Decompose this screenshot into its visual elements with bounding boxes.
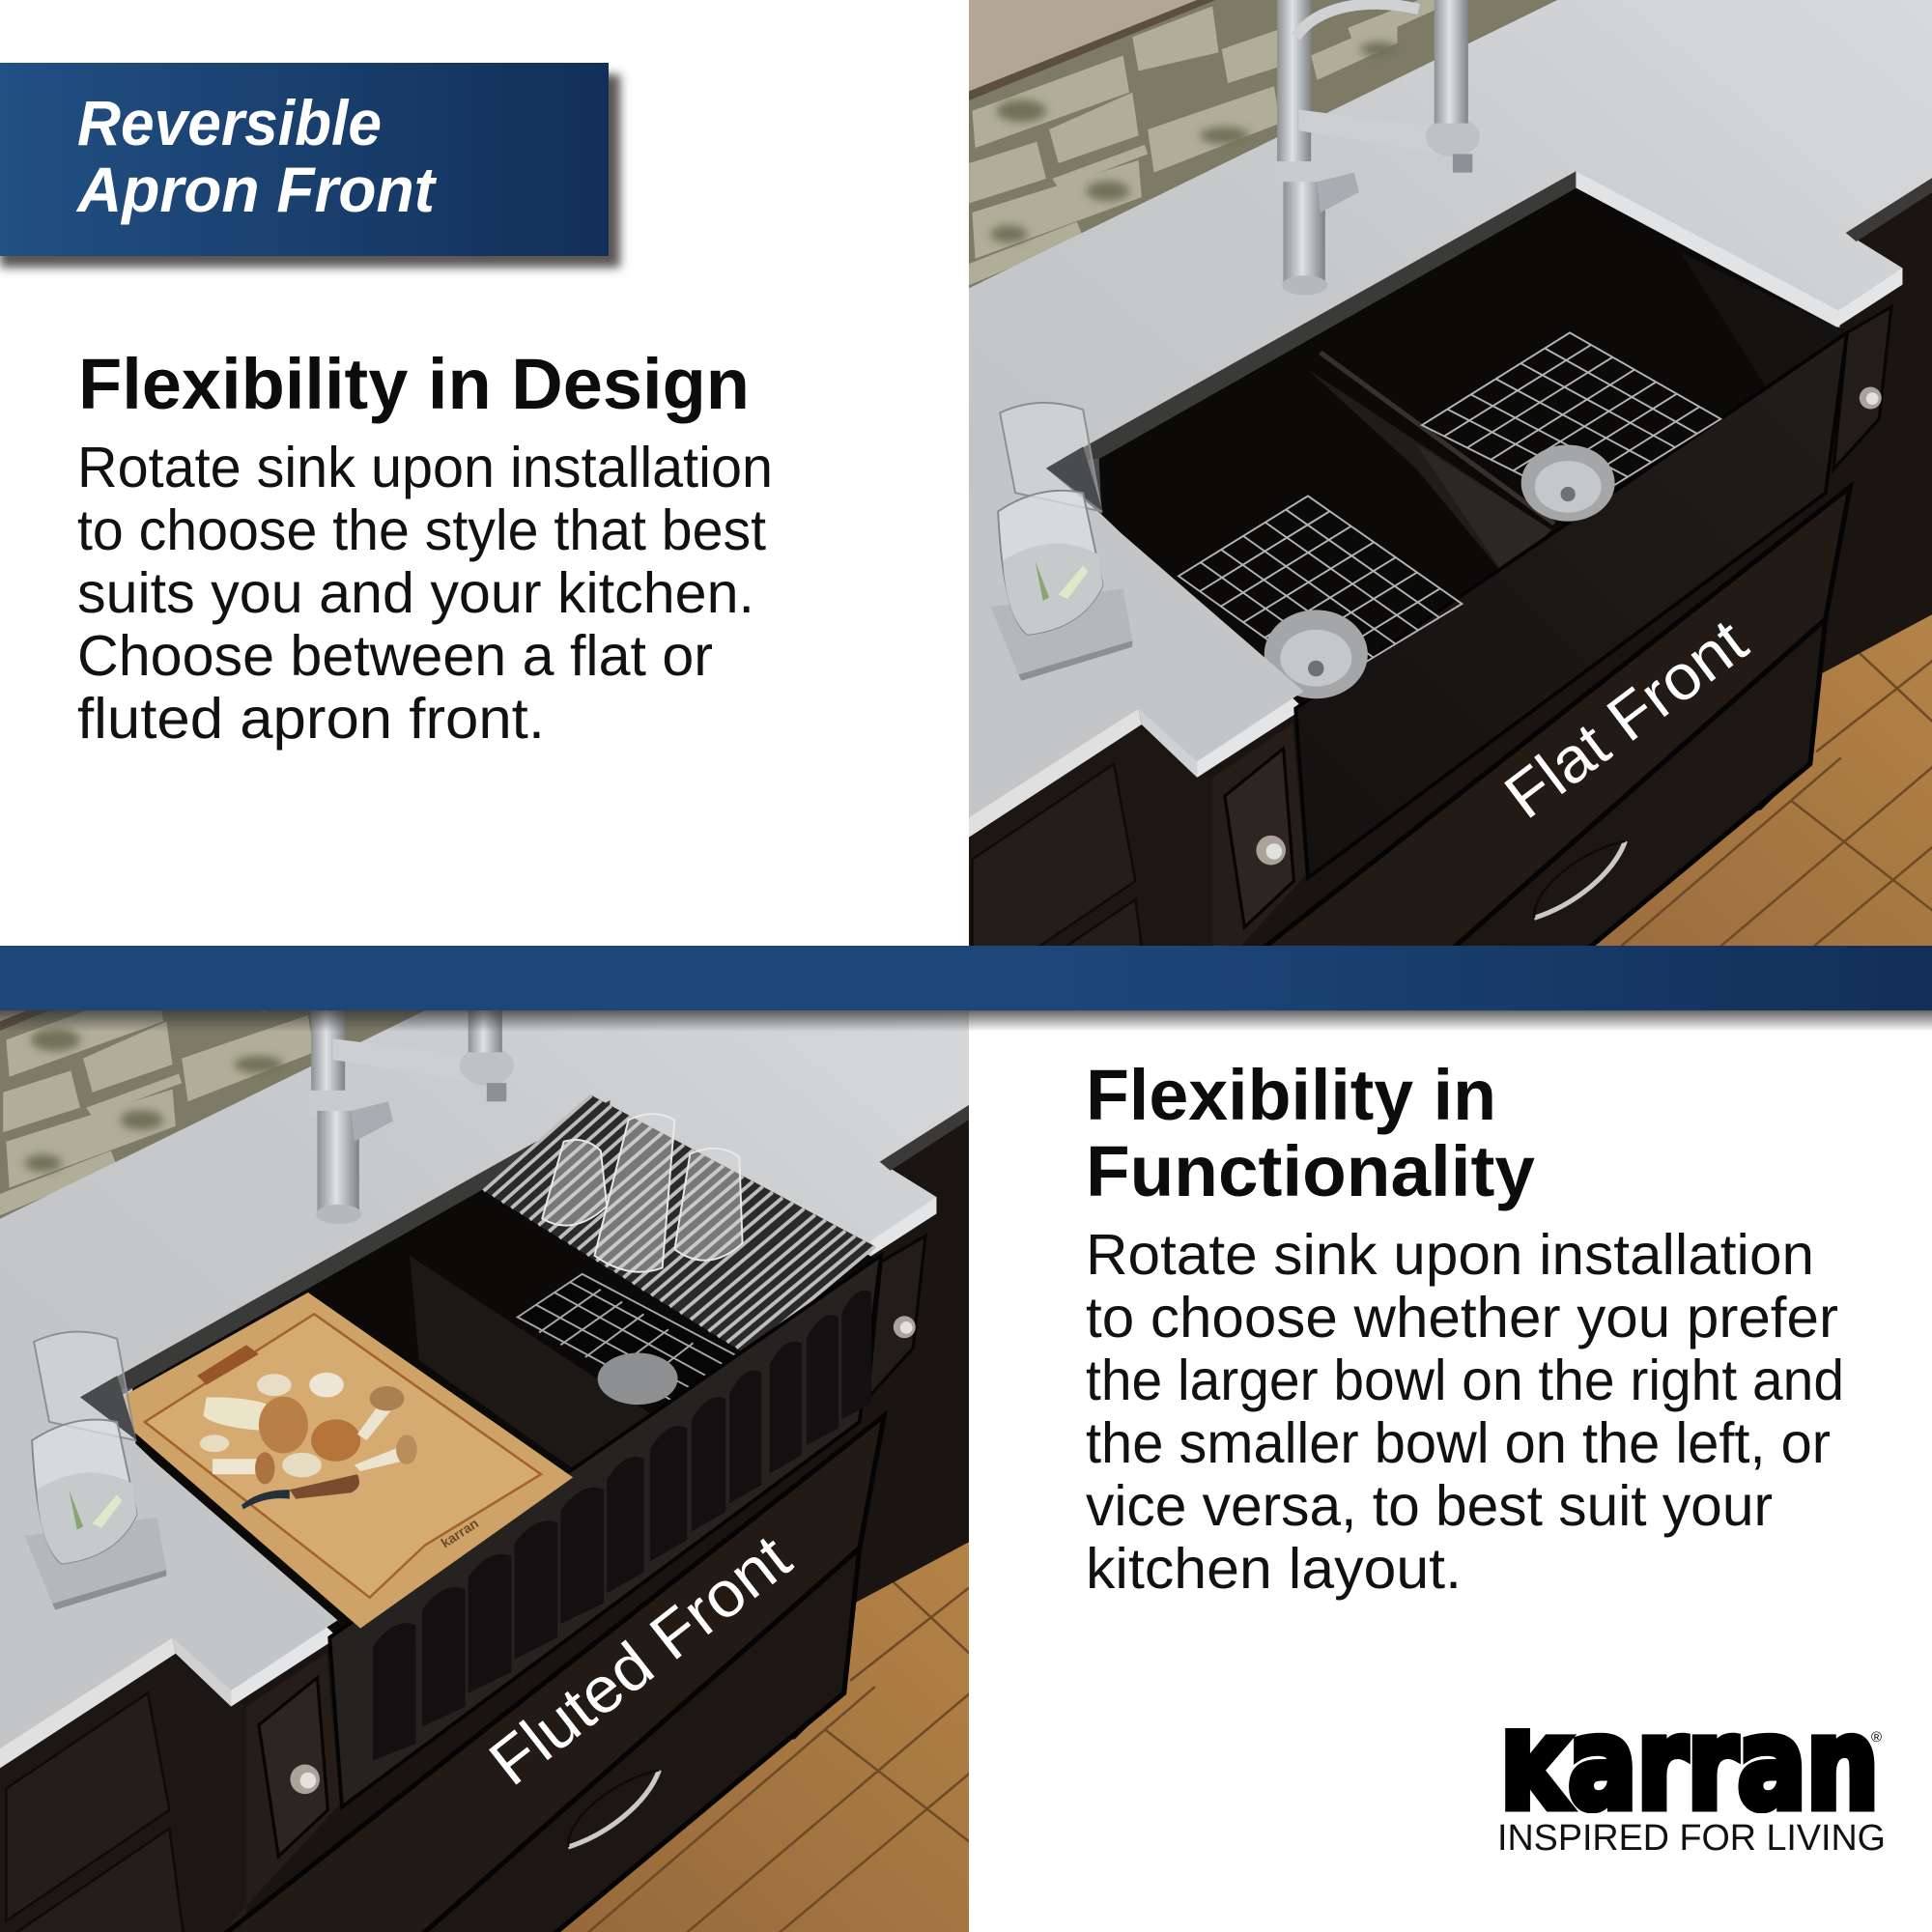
knife <box>242 1474 359 1510</box>
heading: Flexibility in Functionality: Functionality <box>1086 1131 1535 1211</box>
banner title: Reversible <box>77 87 382 158</box>
text: flexibility in design: suits you and your kitchen. <box>77 561 754 625</box>
photo: fluted front sink <box>0 1010 969 1932</box>
text: flexibility in functionality: Rotate sink upon installation <box>1086 1223 1814 1287</box>
sink basin <box>1046 171 1847 878</box>
sink with drying rack <box>80 1095 881 1807</box>
wire grid: right bowl <box>1422 332 1720 505</box>
text: flexibility in functionality: vice versa, to best suit your <box>1086 1474 1773 1538</box>
drain: right <box>1521 444 1615 522</box>
logo: karran: ® <box>1871 1729 1882 1746</box>
text: flexibility in design: to choose the style that best <box>77 498 766 562</box>
heading: Flexibility in Design: Flexibility in Design <box>78 344 750 424</box>
logo: karran <box>1500 1728 1884 1851</box>
logo tagline: INSPIRED FOR LIVING <box>1497 1818 1886 1859</box>
label: Fluted Front: Fluted Front <box>476 1520 805 1800</box>
banner <box>0 63 620 268</box>
mushrooms <box>200 1373 417 1484</box>
label: Flat Front: Flat Front <box>1492 605 1760 832</box>
wire grid: left bowl <box>1179 496 1462 684</box>
divider band <box>0 946 1932 1010</box>
heading: Flexibility in Functionality <box>1086 1055 1535 1211</box>
text: flexibility in functionality <box>1086 1223 1844 1601</box>
text: flexibility in design: fluted apron front. <box>77 687 545 751</box>
text: flexibility in design <box>77 436 773 751</box>
text: flexibility in design: Rotate sink upon installation <box>77 436 773 499</box>
roll-up rack <box>484 1095 875 1354</box>
heading: Flexibility in Functionality: Flexibility in <box>1086 1055 1496 1135</box>
band shadow <box>0 1010 1932 1032</box>
fluted apron <box>329 1256 881 1807</box>
banner title <box>75 87 438 225</box>
banner title: Apron Front <box>75 154 438 225</box>
text: flexibility in functionality: the smaller bowl on the left, or <box>1086 1411 1831 1475</box>
text: flexibility in functionality: to choose whether you prefer <box>1086 1286 1838 1350</box>
cutting board <box>104 1293 573 1629</box>
photo: flat front sink <box>960 0 1932 1023</box>
drain: left <box>1264 610 1368 698</box>
drinking glasses on rack <box>542 1114 743 1272</box>
board brand mark: karran <box>438 1515 481 1550</box>
text: flexibility in functionality: kitchen layout. <box>1086 1537 1462 1601</box>
text: flexibility in functionality: the larger bowl on the right and <box>1086 1349 1844 1412</box>
text: flexibility in design: Choose between a flat or <box>77 624 713 688</box>
